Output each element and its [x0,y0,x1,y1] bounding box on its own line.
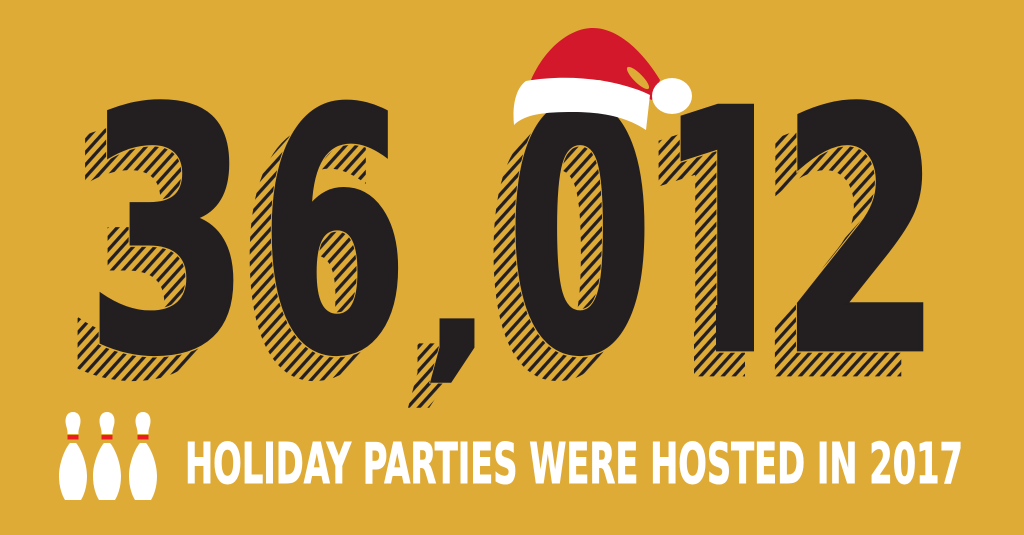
solid digits: , [421,179,493,400]
pin 1 [59,412,87,500]
solid digits: 1 [657,38,807,430]
big number [78,99,924,408]
solid digits: 3 [85,38,251,429]
icon: santa hat [514,28,692,130]
pin 3 [129,412,157,500]
hat slit [624,64,652,92]
solid digits: 0 [506,39,654,430]
solid digits: 6 [259,38,409,430]
solid digits: 2 [779,39,943,430]
hat pompom [652,78,692,114]
icon: bowling pins [59,412,157,500]
infographic canvas [59,28,961,500]
hatched shadow of number [78,128,902,408]
hat body [531,28,660,100]
pin 2 [93,412,121,500]
solid digits [100,99,924,383]
hat brim [514,78,650,130]
